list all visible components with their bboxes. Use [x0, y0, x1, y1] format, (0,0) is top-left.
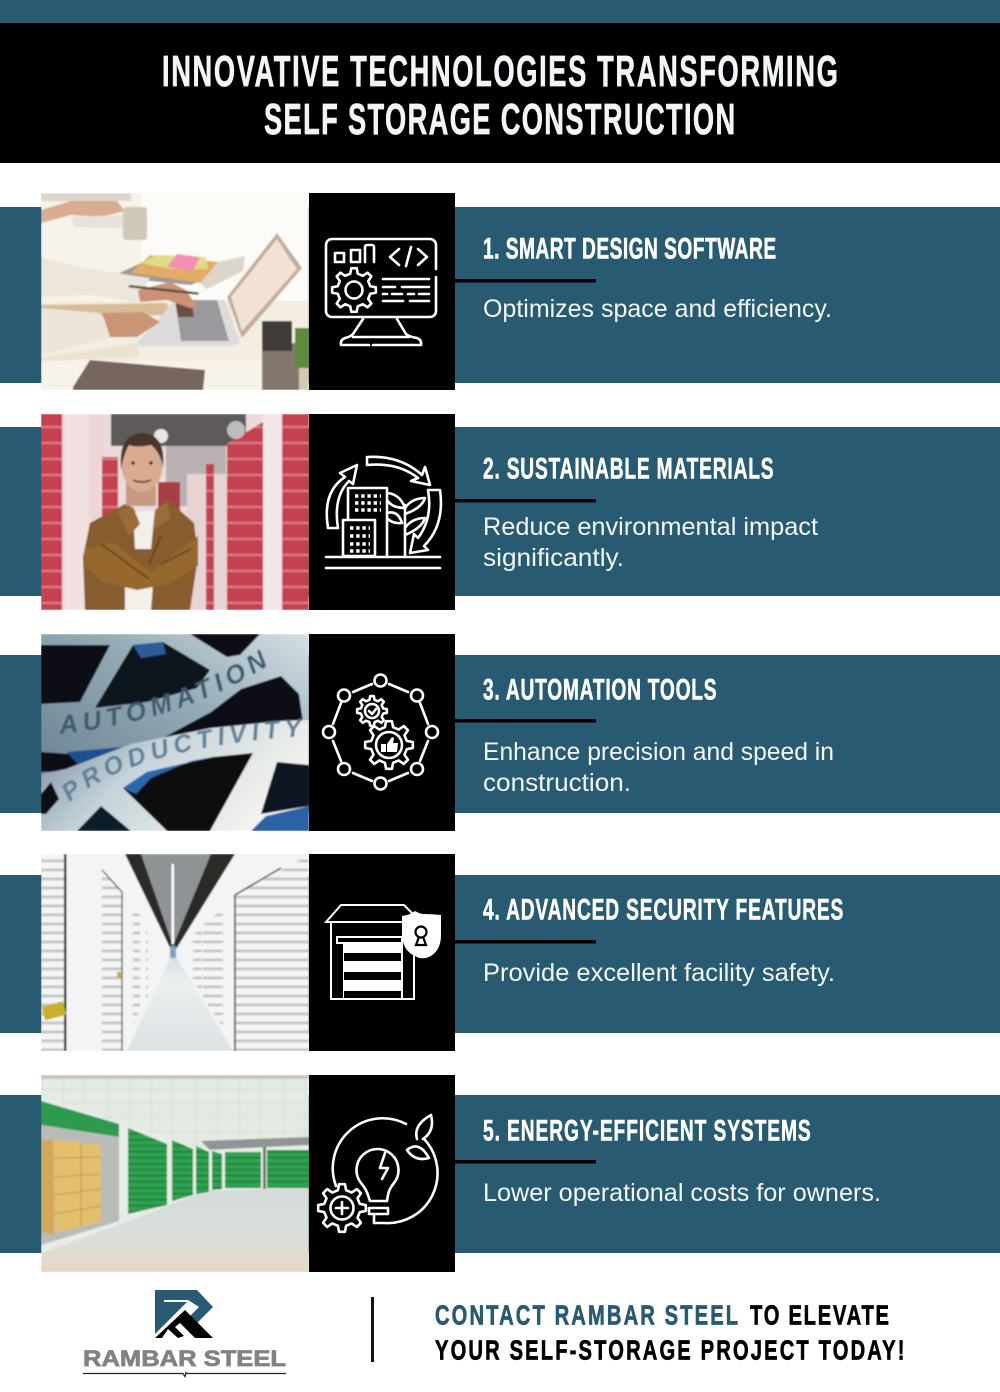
body 2: Reduce environmental impact — [483, 513, 818, 541]
call to action — [435, 1300, 904, 1366]
body 4: Provide excellent facility safety. — [483, 959, 835, 987]
divider 3 — [455, 719, 596, 722]
heading 3: 3. AUTOMATION TOOLS — [483, 673, 717, 707]
heading 1: 1. SMART DESIGN SOFTWARE — [483, 232, 776, 266]
photo: hands typing on laptop — [41, 193, 309, 390]
body 3: construction. — [483, 769, 631, 797]
photo: automation and productivity gears: AUTOMATION — [60, 649, 267, 734]
divider 1 — [455, 279, 596, 282]
footer divider — [371, 1297, 374, 1362]
heading 2: 2. SUSTAINABLE MATERIALS — [483, 452, 774, 486]
panel: advanced security features — [0, 854, 1000, 1051]
call to action: TO ELEVATE — [750, 1300, 889, 1331]
panel: sustainable materials — [0, 414, 1000, 610]
body 3 — [483, 738, 834, 797]
photo: green-door storage units — [41, 1075, 309, 1272]
divider 5 — [455, 1160, 596, 1164]
photo: automation and productivity gears: PRODUCTIVITY — [62, 718, 302, 802]
photo: man in storage corridor — [41, 414, 309, 610]
logo: Rambar Steel — [83, 1290, 286, 1376]
person — [83, 433, 198, 610]
photo: white storage corridor — [41, 854, 309, 1051]
icon panel: computer monitor with code and gear — [309, 193, 455, 390]
divider 4 — [455, 940, 596, 944]
body 1: Optimizes space and efficiency. — [483, 295, 832, 323]
title banner: INNOVATIVE TECHNOLOGIES TRANSFORMING — [162, 46, 838, 96]
heading 4: 4. ADVANCED SECURITY FEATURES — [483, 893, 843, 927]
body 3: Enhance precision and speed in — [483, 738, 834, 766]
photo: automation and productivity gears — [41, 634, 309, 831]
panel: energy-efficient systems — [0, 1075, 1000, 1272]
title banner — [0, 23, 1000, 163]
body 2: significantly. — [483, 544, 624, 572]
title banner: SELF STORAGE CONSTRUCTION — [264, 94, 735, 144]
icon panel: buildings with plant and recycling arrows — [309, 414, 455, 610]
call to action: YOUR SELF-STORAGE PROJECT TODAY! — [435, 1335, 904, 1366]
icon panel: storage unit with security shield — [309, 854, 455, 1051]
panel: automation tools — [0, 634, 1000, 831]
panel: smart design software — [0, 193, 1000, 390]
call to action: CONTACT RAMBAR STEEL — [435, 1300, 738, 1331]
heading 5: 5. ENERGY-EFFICIENT SYSTEMS — [483, 1114, 811, 1148]
icon panel: gears ringed by connected nodes — [309, 634, 455, 831]
divider 2 — [455, 499, 596, 502]
body 2 — [483, 513, 818, 572]
body 5: Lower operational costs for owners. — [483, 1179, 881, 1207]
icon panel: light bulb, gear and leaves — [309, 1075, 455, 1272]
top accent bar — [0, 0, 1000, 23]
logo: Rambar Steel: RAMBAR STEEL — [83, 1346, 286, 1371]
